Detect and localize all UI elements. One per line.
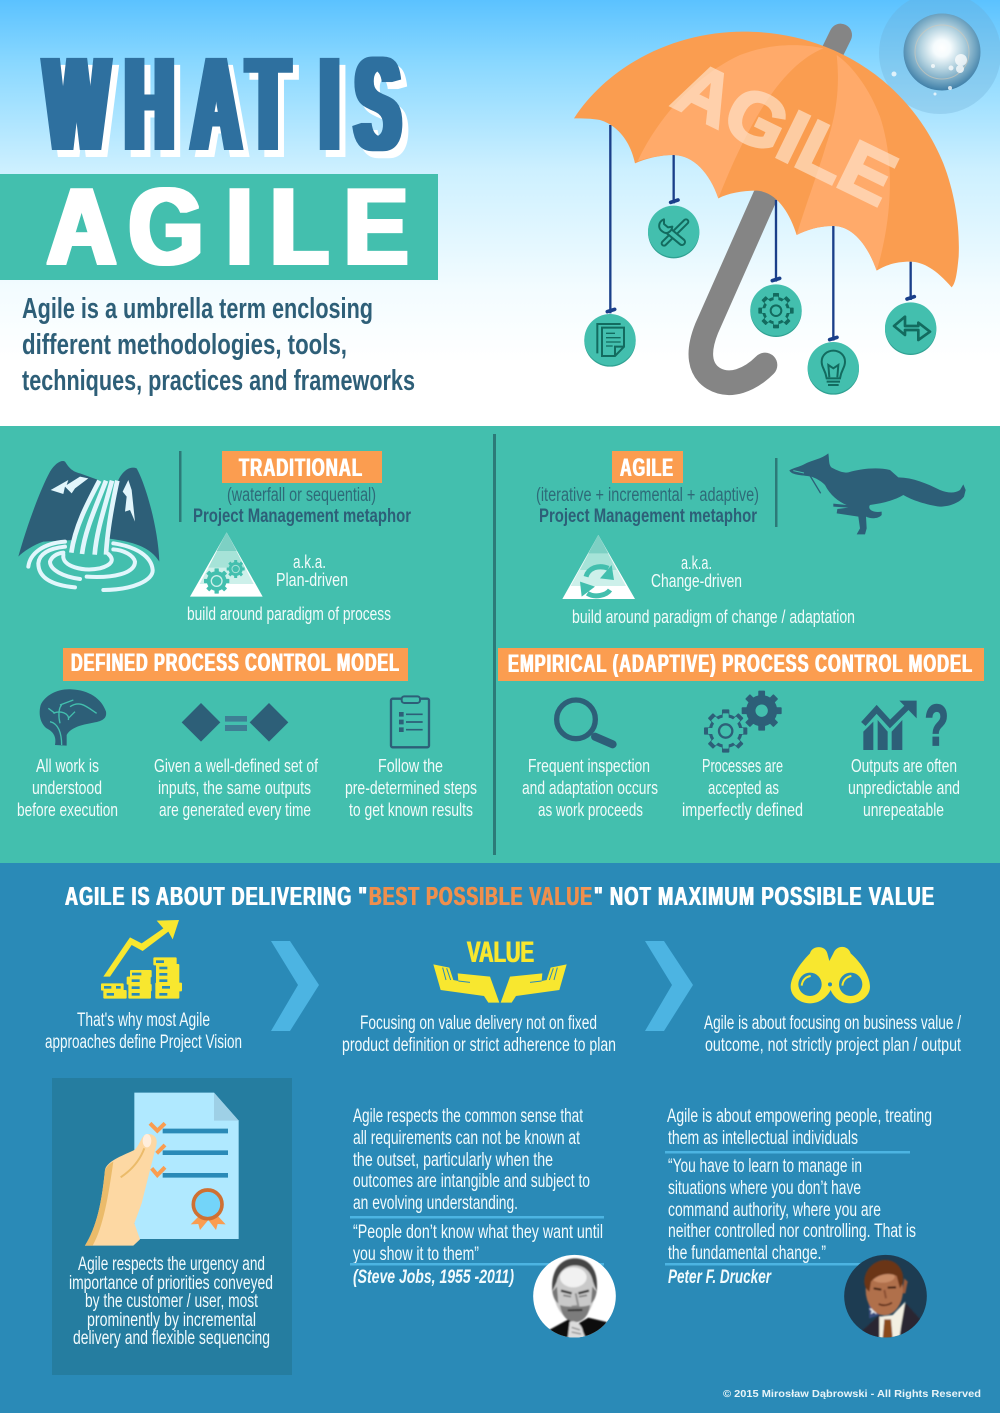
heading: best possible value: AGILE IS ABOUT DELIVERING " (65, 881, 368, 911)
divider right (775, 458, 778, 527)
text: same outputs: are generated every time (159, 799, 311, 820)
heading: defined process control model: DEFINED PROCESS CONTROL MODEL (71, 649, 400, 677)
umbrella tip (832, 35, 841, 53)
sky background (0, 0, 1000, 426)
icon: growth chart and coins (101, 920, 182, 999)
text: follow steps: pre-determined steps (345, 777, 477, 798)
text: value delivery: Focusing on value delivery not on fixed (360, 1013, 597, 1034)
text: common sense: an evolving understanding. (353, 1193, 518, 1214)
arrow: chevron one (271, 941, 319, 1031)
heading: best possible value: BEST POSSIBLE VALUE (369, 881, 593, 911)
intro text: different methodologies, tools, (22, 329, 347, 361)
panel text: by the customer / user, most (85, 1291, 259, 1312)
panel text: Agile respects the urgency and (78, 1254, 265, 1275)
canopy (574, 32, 959, 287)
change-driven label: a.k.a. (681, 552, 712, 573)
heading: agile: AGILE (620, 454, 674, 482)
heading: traditional (222, 451, 382, 483)
heading: agile (612, 451, 683, 483)
text: all work understood: understood (32, 777, 102, 798)
text: unpredictable outputs: unpredictable and (848, 777, 960, 798)
text: imperfectly defined: accepted as (708, 777, 779, 798)
text: common sense: all requirements can not be known at (353, 1128, 581, 1149)
panel text: delivery and flexible sequencing (73, 1328, 270, 1349)
icon: binoculars (791, 947, 870, 1003)
icon: clipboard (391, 696, 429, 747)
blue value background (0, 863, 1000, 1413)
plan-driven label (276, 551, 348, 590)
quote: steve jobs: “People don’t know what they want until (353, 1222, 603, 1243)
copyright: © 2015 Mirosław Dąbrowski - All Rights Reserved (723, 1388, 981, 1400)
quote: steve jobs: you show it to them” (353, 1244, 479, 1265)
attribution: steve jobs: (Steve Jobs, 1955 -2011) (353, 1267, 514, 1288)
icon: waterfall (18, 461, 159, 590)
text: common sense: Agile respects the common sense that (353, 1106, 584, 1127)
change paradigm note: build around paradigm of change / adaptation (572, 606, 855, 627)
text: all work understood: All work is (36, 755, 99, 776)
title: what is: WHAT IS (45, 30, 400, 179)
change-driven label (651, 552, 742, 591)
agile subtitle: (iterative + incremental + adaptive) (536, 485, 759, 506)
text: common sense (353, 1106, 590, 1214)
portrait: peter drucker (844, 1255, 927, 1338)
quote: peter drucker (668, 1156, 916, 1264)
icon: arrows (885, 302, 936, 355)
process paradigm note: build around paradigm of process (187, 603, 391, 624)
arrow: chevron two (645, 941, 693, 1031)
quote: peter drucker: neither controlled nor controlling. That is (668, 1221, 916, 1242)
teal comparison background (0, 426, 1000, 864)
light canopy panel right (797, 55, 890, 271)
icon: value hands (433, 936, 567, 1003)
umbrella (574, 32, 959, 395)
text: empowering people (667, 1106, 932, 1149)
text: frequent inspection: and adaptation occurs (522, 777, 658, 798)
icon: change-driven pyramid (562, 535, 635, 599)
text: common sense: outcomes are intangible and subject to (353, 1171, 590, 1192)
text: same outputs (154, 755, 319, 820)
icon: chart with question mark: ? (925, 694, 949, 758)
divider (493, 434, 496, 855)
attribution: peter drucker: Peter F. Drucker (668, 1267, 772, 1288)
icon: diamonds equal (182, 703, 288, 742)
agile subtitle: Project Management metaphor (539, 505, 757, 527)
intro text (22, 293, 415, 397)
icon: gear (750, 284, 802, 337)
icon: magnifier (557, 700, 613, 744)
text: all work understood (17, 755, 118, 820)
light canopy panel left (638, 45, 823, 198)
panel: urgency and priorities (52, 1078, 292, 1375)
text: unpredictable outputs: unrepeatable (863, 799, 944, 820)
title: what is: WHAT IS (51, 37, 406, 186)
text: project vision: approaches define Project Vision (45, 1032, 242, 1053)
divider left (179, 451, 182, 522)
change-driven label: Change-driven (651, 570, 742, 591)
text: imperfectly defined (682, 755, 803, 820)
strings (607, 125, 914, 341)
icon: document held by hand (85, 1093, 239, 1246)
quote: peter drucker: situations where you don’t have (668, 1178, 861, 1199)
intro text: Agile is a umbrella term enclosing (22, 293, 373, 325)
panel text (69, 1254, 273, 1349)
text: imperfectly defined: Processes are (702, 755, 783, 776)
text: follow steps: to get known results (349, 799, 473, 820)
text: frequent inspection (522, 755, 658, 820)
text: same outputs: Given a well-defined set of (154, 755, 319, 776)
plan-driven label: Plan-driven (276, 569, 348, 590)
text: value delivery: product definition or strict adherence to plan (342, 1035, 616, 1056)
text: same outputs: inputs, the same outputs (158, 777, 311, 798)
text: common sense: the outset, particularly when the (353, 1150, 553, 1171)
text: business value (704, 1013, 962, 1056)
traditional subtitle: Project Management metaphor (193, 505, 411, 527)
icon: plan-driven pyramid (190, 532, 263, 597)
intro text: techniques, practices and frameworks (22, 365, 415, 397)
icon: glass orb (879, 0, 1000, 114)
traditional subtitle: (waterfall or sequential) (227, 485, 376, 506)
text: follow steps (345, 755, 477, 820)
heading: traditional: TRADITIONAL (239, 454, 363, 482)
text: value delivery (342, 1013, 616, 1056)
icon: chart with question mark (863, 694, 949, 758)
icon: fox (789, 453, 966, 534)
panel text: importance of priorities conveyed (69, 1273, 273, 1294)
plan-driven label: a.k.a. (293, 551, 326, 572)
text: project vision: That's why most Agile (77, 1010, 210, 1031)
quote: steve jobs (353, 1222, 603, 1265)
text: follow steps: Follow the (378, 755, 443, 776)
panel text: prominently by incremental (87, 1310, 256, 1331)
heading: best possible value (65, 881, 935, 911)
quote: peter drucker: “You have to learn to manage in (668, 1156, 862, 1177)
quote: peter drucker: the fundamental change.” (668, 1243, 826, 1264)
text: imperfectly defined: imperfectly defined (682, 799, 803, 820)
quote: peter drucker: command authority, where you are (668, 1200, 881, 1221)
text: all work understood: before execution (17, 799, 118, 820)
title: agile banner: AGILE (47, 165, 408, 287)
text: frequent inspection: as work proceeds (538, 799, 643, 820)
text: empowering people: them as intellectual individuals (668, 1128, 858, 1149)
text: unpredictable outputs (848, 755, 960, 820)
icon: gears (704, 691, 782, 753)
heading: defined process control model (63, 648, 408, 681)
portrait: steve jobs (533, 1255, 616, 1338)
umbrella handle (701, 197, 765, 383)
traditional subtitle (193, 485, 411, 527)
icon: brain (40, 689, 106, 746)
icon: light bulb (808, 342, 859, 395)
icon: documents (584, 314, 636, 367)
umbrella label: AGILE (663, 45, 909, 222)
text: project vision (45, 1010, 242, 1053)
icon: value hands: VALUE (467, 936, 534, 969)
agile subtitle (536, 485, 759, 527)
icon: tools (648, 206, 699, 258)
text: unpredictable outputs: Outputs are often (851, 755, 957, 776)
text: frequent inspection: Frequent inspection (528, 755, 650, 776)
